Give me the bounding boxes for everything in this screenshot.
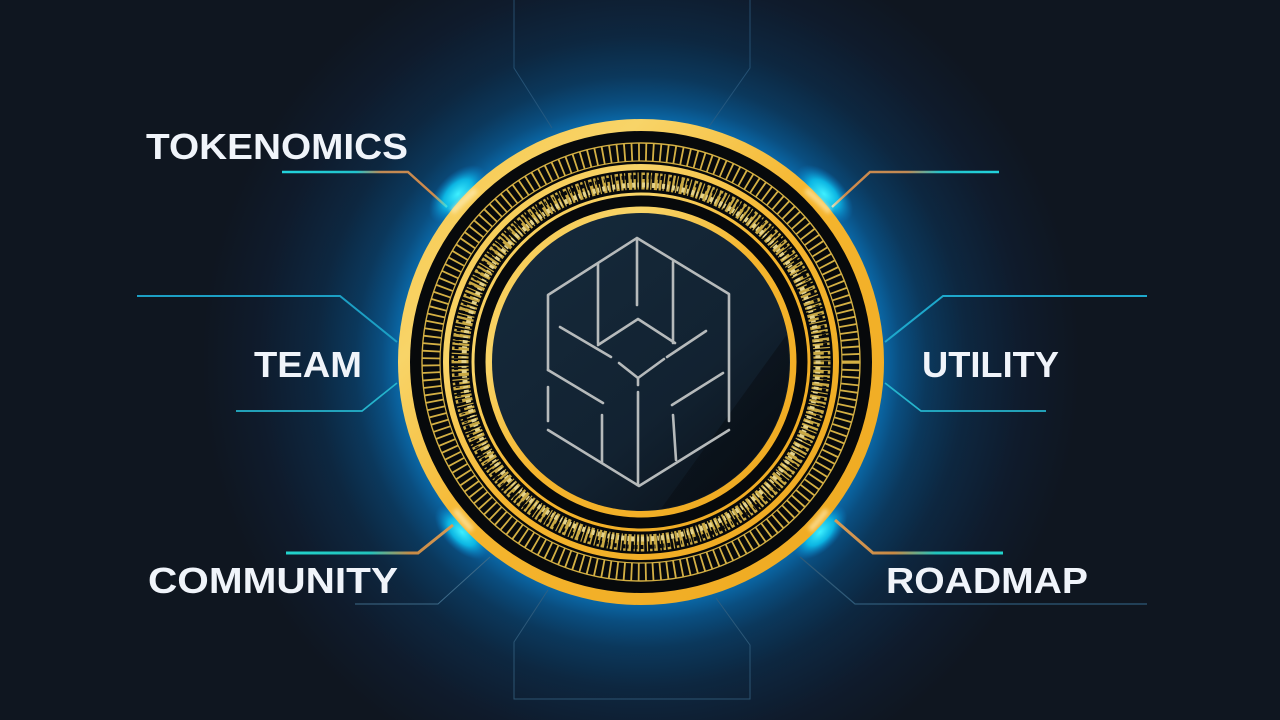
label: roadmap: ROADMAP [886,560,1088,601]
inner gold ring [489,210,793,514]
disk sheen [662,336,789,508]
glow flares [418,154,864,569]
top connector frame [514,0,750,128]
connector: community [286,525,453,553]
coin [398,119,884,605]
gold ring middle [446,167,836,557]
connector: roadmap [835,520,1003,553]
inner disk [492,213,790,511]
connector: utility lower [885,383,1046,411]
label: team: TEAM [254,344,362,385]
connector: team upper [137,296,397,342]
label: tokenomics: TOKENOMICS [146,126,408,167]
connector: tokenomics [282,172,447,207]
thin gold ring [473,194,809,530]
label: utility: UTILITY [922,344,1059,385]
connector: utility upper [885,296,1147,342]
rim highlights [452,190,830,530]
coin black face [410,131,872,593]
connector: community lower [355,557,490,604]
connector: top right [832,172,999,207]
bottom connector frame [514,590,750,699]
inscription ring [456,177,826,547]
label: community: COMMUNITY [148,560,398,601]
connector: roadmap lower [800,557,1147,604]
tick ring [422,143,860,581]
coin outer rim [398,119,884,605]
connector: team lower [236,383,397,411]
hexagon emblem [548,238,729,486]
